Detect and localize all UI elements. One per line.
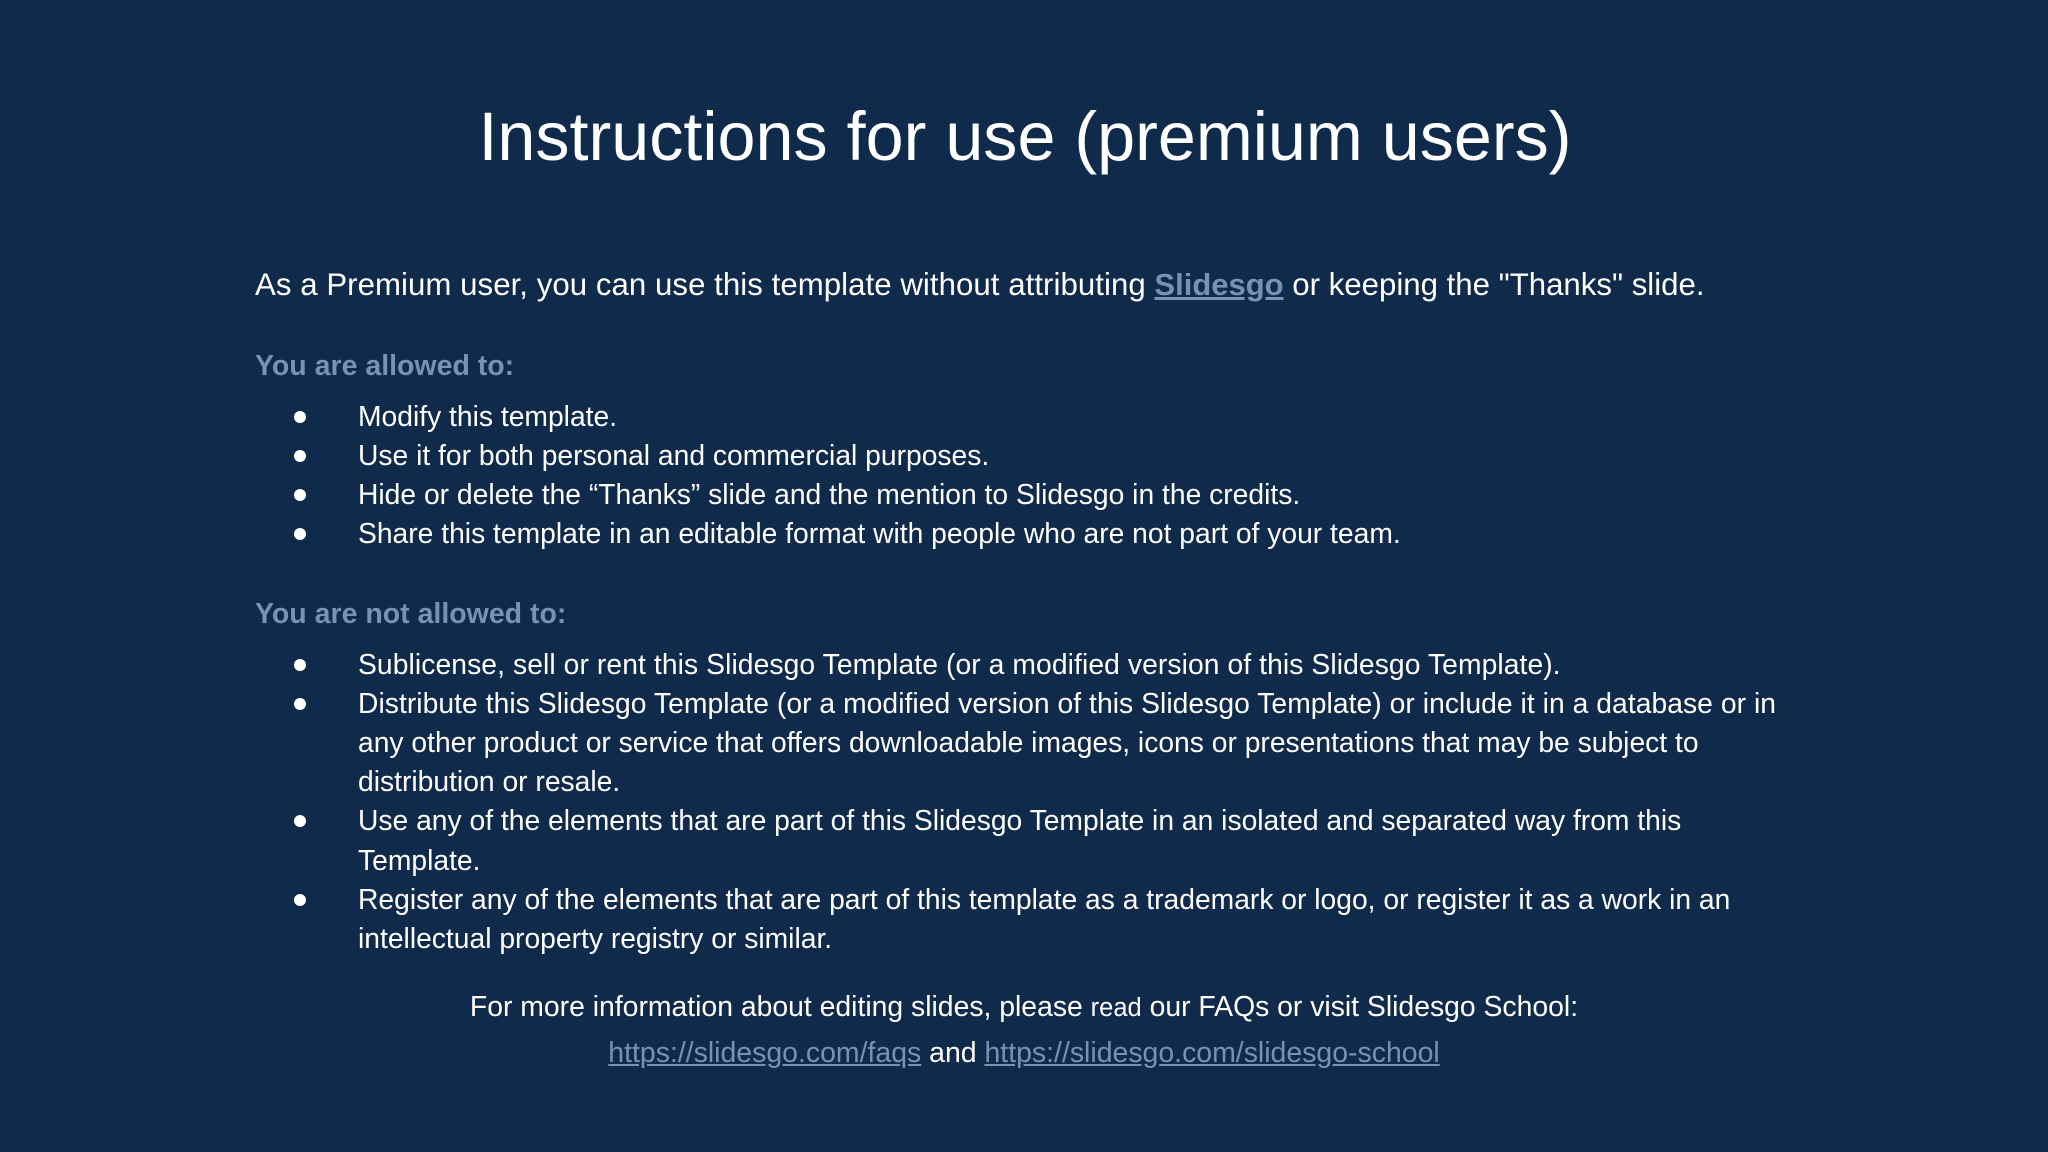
bullet item (358, 804, 1681, 876)
title: Instructions for use (premium users) (478, 99, 1572, 175)
bullet item: Hide or delete the “Thanks” slide and the mention to Slidesgo in the credits. (358, 478, 1300, 510)
bullet item (358, 883, 1730, 954)
bullet item: Modify this template. (358, 400, 617, 432)
heading: allowed: You are allowed to: (255, 350, 514, 382)
bullet item: Distribute this Slidesgo Template (or a modified version of this Slidesgo Template) or include it in a database or in (358, 687, 1776, 719)
bullet item (358, 687, 1776, 797)
bullet item: Use any of the elements that are part of this Slidesgo Template in an isolated and separated way from this (358, 804, 1681, 836)
bullet item: any other product or service that offers downloadable images, icons or presentations that may be subject to (358, 726, 1699, 758)
footer text: For more information about editing slides, please read our FAQs or visit Slidesgo School: (470, 991, 1578, 1023)
footer links: https://slidesgo.com/faqs and https://slidesgo.com/slidesgo-school (608, 1037, 1440, 1069)
bullet item: intellectual property registry or similar. (358, 922, 832, 954)
bullet item: Sublicense, sell or rent this Slidesgo Template (or a modified version of this Slidesgo Template). (358, 648, 1561, 680)
intro text: As a Premium user, you can use this template without attributing Slidesgo or keeping the "Thanks" slide. (255, 267, 1705, 302)
list: not allowed (294, 648, 1776, 954)
list: allowed (294, 400, 1401, 549)
bullet item: Share this template in an editable format with people who are not part of your team. (358, 517, 1401, 549)
bullet item: distribution or resale. (358, 765, 620, 797)
bullet item: Register any of the elements that are part of this template as a trademark or logo, or register it as a work in an (358, 883, 1730, 915)
heading: not allowed: You are not allowed to: (255, 598, 566, 630)
bullet item: Use it for both personal and commercial purposes. (358, 439, 989, 471)
bullet item: Template. (358, 844, 480, 876)
